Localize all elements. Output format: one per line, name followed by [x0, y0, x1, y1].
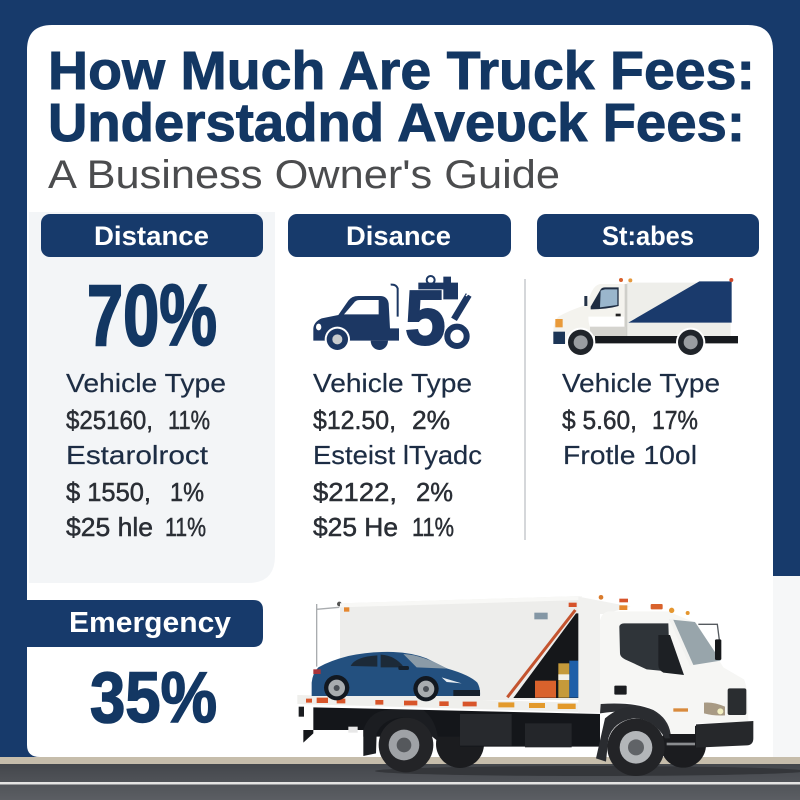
text block: column 2 fees	[313, 368, 482, 542]
heading pill: Emergency: Emergency	[69, 607, 231, 639]
text block: column 1 fees: $25 hle	[66, 512, 153, 542]
truck cab	[600, 604, 753, 748]
stat: 35%: 35%	[90, 659, 217, 738]
text block: column 1 fees: $25160,	[66, 405, 153, 435]
text block: column 1 fees: Estarolroct	[66, 440, 209, 470]
heading pill: Stabes	[537, 214, 759, 257]
heading pill: Distance: Distance	[94, 221, 209, 251]
text block: column 1 fees: $ 1550,	[66, 477, 151, 507]
rear wheels behind body	[436, 720, 706, 768]
text block: column 3 fees	[562, 368, 720, 470]
text block: column 1 fees: 11%	[168, 405, 210, 435]
text block: column 2 fees: 11%	[412, 512, 454, 542]
text block: column 1 fees: 11%	[165, 512, 206, 542]
cargo box	[317, 595, 631, 713]
panel: left light column	[29, 212, 275, 583]
panel: emergency	[27, 600, 263, 738]
text block: column 1 fees: Vehicle Type	[66, 368, 226, 398]
text block: column 1 fees	[66, 368, 226, 542]
heading pill: Disance	[288, 214, 511, 257]
text block: column 2 fees: $12.50,	[313, 405, 396, 435]
icon: box van	[553, 278, 738, 357]
icon: car with tools and 5%	[313, 276, 471, 362]
text block: column 2 fees: $2122,	[313, 477, 397, 507]
text block: column 3 fees: Vehicle Type	[562, 368, 720, 398]
text block: column 2 fees: 2%	[416, 477, 453, 507]
title	[48, 41, 755, 153]
icon: car with tools and 5%: 5	[405, 276, 446, 362]
stat: 70%: 70%	[87, 268, 217, 364]
text block: column 2 fees: 2%	[412, 405, 450, 435]
text block: column 1 fees: 1%	[170, 477, 204, 507]
chassis and flatbed	[297, 695, 600, 756]
text block: column 2 fees: Vehicle Type	[313, 368, 472, 398]
heading pill: Stabes: St:abes	[602, 221, 694, 251]
text block: column 2 fees: Esteist lTyadc	[313, 440, 482, 470]
text block: column 2 fees: $25 He	[313, 512, 398, 542]
title: Understadnd Aveυck Fees:	[48, 93, 745, 153]
front wheels	[379, 706, 670, 776]
text block: column 3 fees: 17%	[652, 405, 698, 435]
text block: column 3 fees: $ 5.60,	[562, 405, 637, 435]
road	[0, 745, 800, 800]
heading pill: Emergency	[27, 600, 263, 647]
panel: column 3	[537, 214, 759, 470]
heading pill: Distance	[41, 214, 263, 257]
heading pill: Disance: Disance	[346, 221, 451, 251]
panel: column 2	[288, 214, 511, 542]
subtitle: A Business Owner's Guide	[48, 153, 560, 197]
car on flatbed	[312, 652, 480, 701]
illustration: flatbed tow truck with car	[297, 595, 753, 776]
panel: column 1	[41, 214, 263, 542]
title: How Much Are Truck Fees:	[48, 41, 755, 101]
text block: column 3 fees: Frotle 10ol	[563, 440, 697, 470]
